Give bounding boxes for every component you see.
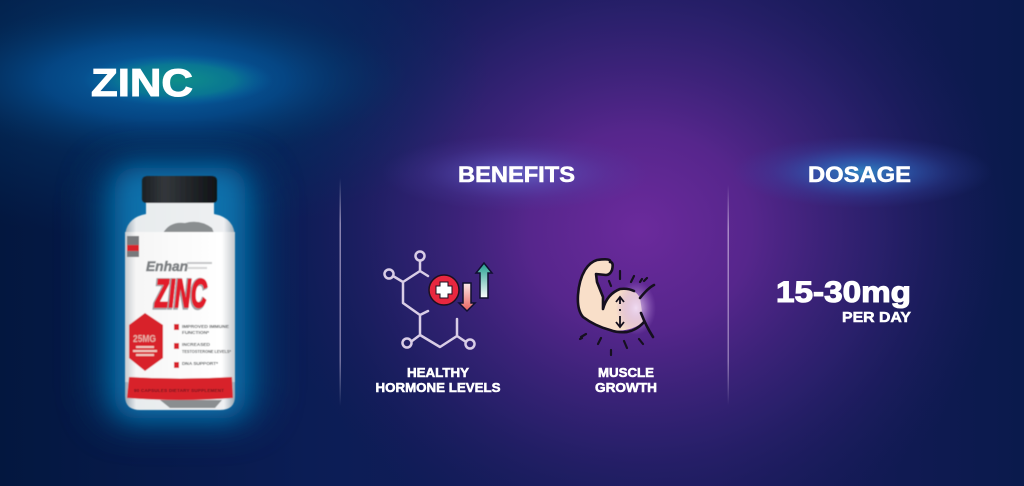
dosage heading: DOSAGE [808, 162, 911, 187]
bottle outer glow [96, 165, 264, 423]
divider right [728, 185, 729, 405]
bottle feature list: DNA SUPPORT* [182, 361, 218, 366]
double arrow [616, 297, 624, 327]
benefits heading [381, 135, 651, 211]
capsules [160, 222, 222, 408]
bottle feature list [174, 324, 231, 368]
bottle feature list: IMPROVED IMMUNE [182, 324, 229, 329]
product name: ZINC [153, 271, 207, 317]
title: ZINC [91, 62, 193, 105]
bottle cap [142, 176, 217, 203]
bottle feature list: INCREASED [182, 342, 211, 347]
label [125, 232, 235, 382]
arm outline [578, 259, 654, 337]
red band [127, 377, 233, 400]
medical cross [429, 275, 459, 305]
red hexagon [129, 313, 163, 371]
label: muscle: MUSCLE [598, 365, 654, 380]
bottle body [125, 203, 235, 410]
arrow up [476, 263, 492, 298]
label: healthy hormone levels: HEALTHY [407, 365, 469, 380]
arrow down [459, 283, 475, 311]
icon: flexed muscle [578, 259, 656, 355]
dose frequency: PER DAY [842, 309, 911, 326]
divider left [340, 178, 341, 406]
label: hormone levels line: HORMONE LEVELS [376, 380, 501, 395]
dosage heading [732, 136, 992, 208]
brand name: Enhan [146, 258, 188, 274]
icon: hormone molecule [384, 252, 492, 348]
dose amount: 15-30mg [776, 276, 911, 309]
product bottle: ZINC [154, 272, 208, 316]
red hexagon: 25MG [133, 334, 156, 345]
product bottle [125, 176, 235, 410]
bottle feature list: TESTOSTERONE LEVELS* [182, 349, 231, 354]
arm fill [578, 259, 643, 331]
label: growth: GROWTH [595, 380, 657, 395]
bottle feature list: FUNCTION* [182, 330, 209, 335]
rays [580, 271, 647, 355]
small badge [127, 236, 139, 257]
bottle glow [115, 168, 245, 418]
product bottle: 90 CAPSULES DIETARY SUPPLEMENT [134, 388, 224, 393]
benefits heading: BENEFITS [458, 162, 575, 187]
